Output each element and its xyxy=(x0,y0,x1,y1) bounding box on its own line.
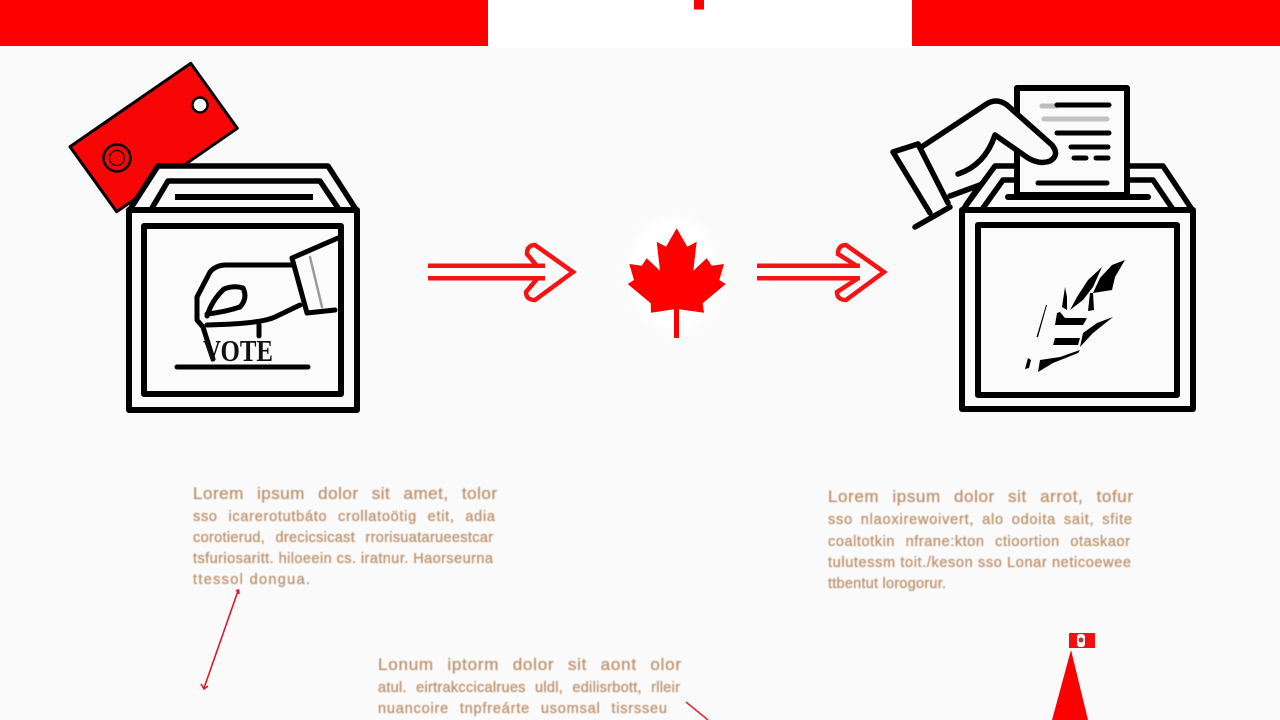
text block: right: Lorem ipsum dolor sit arrot, tofur xyxy=(828,487,1133,506)
text block: right: ttbentut lorogorur. xyxy=(828,576,946,592)
text block: bottom center: nuancoire tnpfreárte usomsal tisrsseu xyxy=(378,701,667,717)
text block: bottom center: Lonum iptorm dolor sit aont olor xyxy=(378,655,681,674)
box lid xyxy=(962,166,1193,211)
header band xyxy=(0,0,1280,48)
icon: right ballot box with paper and hand xyxy=(893,88,1193,409)
text block: left: sso icarerotutbáto crollatoötig etit, adia xyxy=(193,509,496,525)
text block: left: tsfuriosaritt. hiloeein cs. iratnur. Haorseurna xyxy=(193,551,494,567)
text block: right: coaltotkin nfrane:kton ctioortion otaskaor xyxy=(828,534,1130,550)
icon: hand marking vote xyxy=(197,238,338,359)
arrow: thin lower center xyxy=(686,702,708,720)
text block: right: tulutessm toit./keson sso Lonar neticoewee xyxy=(828,555,1131,571)
arrow: left xyxy=(428,245,573,300)
ballot paper xyxy=(1017,88,1127,195)
icon: feather xyxy=(1025,260,1125,372)
icon: hand inserting ballot xyxy=(893,101,1056,227)
text block: right xyxy=(828,487,1133,592)
arrow: right xyxy=(757,245,884,300)
slot xyxy=(1008,194,1148,200)
text block: left: corotierud, drecicsicast rrorisuatarueestcar xyxy=(193,530,493,546)
icon: maple leaf xyxy=(628,216,726,338)
icon: red ticket xyxy=(70,63,237,212)
box lid xyxy=(129,166,357,211)
text block: right: sso nlaoxirewoivert, alo odoita sait, sfite xyxy=(828,512,1132,528)
icon: left ballot box with red ticket xyxy=(70,63,357,410)
box front panel xyxy=(978,225,1177,395)
box front panel xyxy=(144,226,341,394)
text block: bottom center: atul. eirtrakccicalrues uldl, edilisrbott, rlleir xyxy=(378,680,680,696)
text block: bottom center xyxy=(378,655,681,717)
box body xyxy=(129,210,357,410)
icon: flag on red cone xyxy=(1052,633,1095,720)
text block: left: Lorem ipsum dolor sit amet, tolor xyxy=(193,484,497,503)
box body xyxy=(962,210,1193,409)
vote word: VOTE xyxy=(203,333,273,368)
text block: left xyxy=(193,484,497,588)
arrow: thin lower left xyxy=(201,590,239,689)
text block: left: ttessol dongua. xyxy=(193,572,310,588)
